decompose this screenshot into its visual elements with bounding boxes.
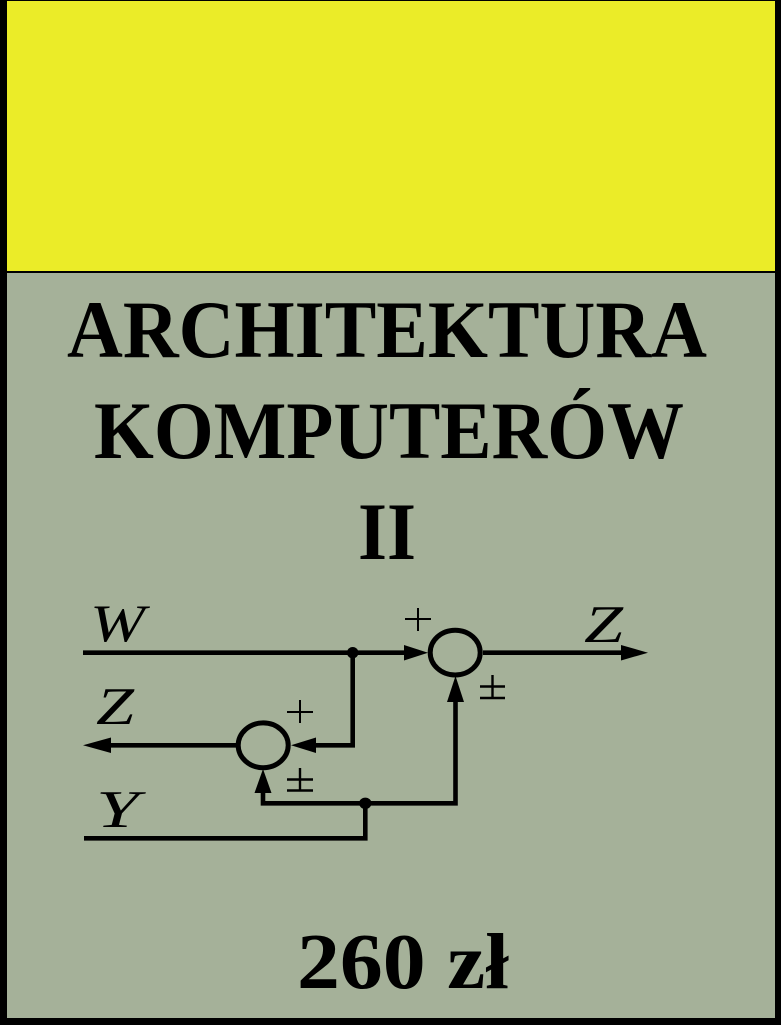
label Z left: Z: [96, 678, 135, 736]
title line 2: KOMPUTERÓW: [94, 385, 684, 476]
variable labels: [90, 595, 624, 839]
junction dots: [347, 647, 371, 809]
price: 260 zł: [297, 919, 509, 1006]
panel: grey-green lower area: [7, 273, 775, 1018]
summing circles: [238, 630, 480, 768]
label Y: Y: [96, 781, 147, 839]
wires: [83, 653, 624, 838]
plus-minus signs: [287, 675, 505, 790]
title: [67, 284, 707, 577]
title line 3: II: [358, 486, 416, 577]
label W: W: [90, 595, 151, 653]
title line 1: ARCHITEKTURA: [67, 284, 707, 375]
label Z right: Z: [584, 596, 624, 654]
diagram: adder circuit: [83, 595, 648, 839]
arrowheads: [83, 645, 648, 793]
panel: yellow top band: [7, 1, 775, 271]
plus signs: [287, 608, 431, 723]
